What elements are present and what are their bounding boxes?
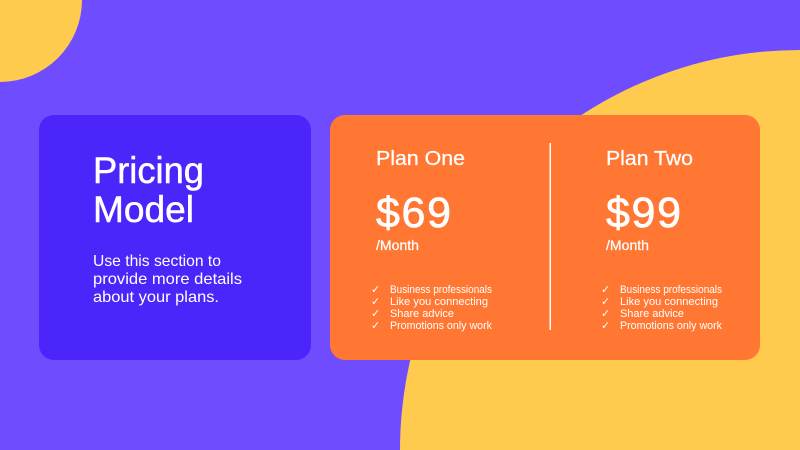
plan two feature list: Promotions only work [620,320,722,332]
plan one [371,148,492,332]
plan two feature list: Share advice [620,308,684,320]
text block: plan description: about your plans. [93,289,219,306]
plan two [601,148,722,332]
plan one price: $69 [376,189,451,237]
panel: plans [330,115,760,360]
text block: plan description: Use this section to [93,253,221,270]
plan two feature list [601,283,722,332]
plan one feature list: ✓ [371,319,380,332]
plan two feature list: ✓ [601,307,610,320]
panel: pricing model intro [39,115,311,360]
plan one feature list: Promotions only work [390,320,492,332]
plan one name: Plan One [376,148,465,170]
plan one period: /Month [376,237,419,253]
plan one feature list: Business professionals [390,284,492,296]
text block: plan description [93,253,242,306]
plan two price: $99 [606,189,681,237]
decorative yellow circle: bottom right [400,50,800,450]
heading: Pricing Model: Model [93,189,194,230]
plan one feature list: Like you connecting [390,296,488,308]
plan one feature list: ✓ [371,283,380,296]
heading: Pricing Model [93,150,204,230]
plan two feature list: Business professionals [620,284,722,296]
plan two period: /Month [606,237,649,253]
decorative yellow circle: top left [0,0,82,82]
divider between plans [550,143,551,330]
plan one feature list [371,283,492,332]
plan two name: Plan Two [606,148,693,170]
plan one feature list: ✓ [371,295,380,308]
plan two feature list: ✓ [601,319,610,332]
plan two feature list: ✓ [601,295,610,308]
heading: Pricing Model: Pricing [93,150,204,191]
plan two feature list: ✓ [601,283,610,296]
text block: plan description: provide more details [93,271,242,288]
plan one feature list: Share advice [390,308,454,320]
plan one feature list: ✓ [371,307,380,320]
plan two feature list: Like you connecting [620,296,718,308]
